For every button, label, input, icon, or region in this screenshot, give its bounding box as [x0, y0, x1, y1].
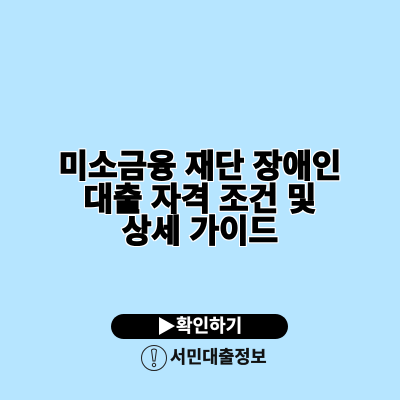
button: confirm: [111, 314, 288, 339]
title: 대출 자격 조건 및: [84, 181, 316, 217]
brand name: 서민대출정보: [170, 347, 267, 367]
brand logo: [141, 345, 267, 371]
title: [59, 148, 341, 249]
button label: 확인하기: [176, 316, 242, 336]
title: 상세 가이드: [122, 213, 278, 249]
title: 미소금융 재단 장애인: [59, 148, 341, 184]
icon: exclamation circle: [141, 345, 167, 371]
icon: play triangle: [159, 317, 175, 335]
